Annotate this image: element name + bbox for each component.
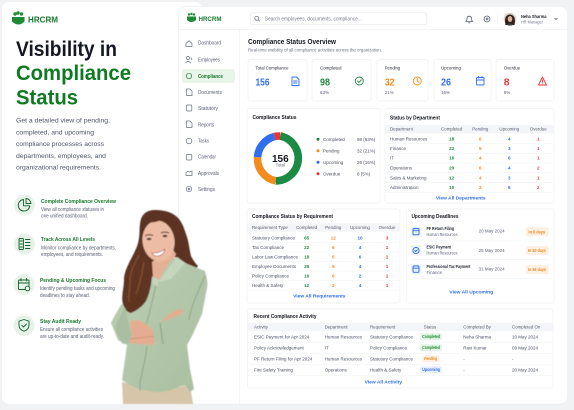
activity table: Completed On — [512, 324, 541, 330]
requirement table: 12 — [304, 283, 310, 288]
activity table: Ravi Kumar — [463, 345, 487, 350]
KPI: upcoming: 26 — [441, 76, 451, 88]
page heading — [248, 37, 382, 54]
panel: compliance status by requirement: View All Requirements — [293, 294, 346, 300]
activity table: Neha Sharma — [463, 334, 492, 339]
status badges — [420, 333, 442, 373]
face — [140, 218, 177, 264]
department table: 18 — [449, 136, 455, 141]
panel: recent compliance activity: View All Activity — [365, 380, 402, 386]
feature: stay audit ready: Stay Audit Ready — [40, 319, 82, 325]
department table: Human Resources — [390, 136, 428, 141]
department table: 6 — [508, 156, 511, 161]
activity table: 09 May 2024 — [512, 345, 539, 350]
department table: 1 — [537, 136, 540, 141]
deadline: professional tax payment: 31 May 2024 — [479, 267, 505, 272]
panel: status by department: View All Departments — [436, 196, 486, 202]
donut legend: 26 (16%) — [357, 160, 376, 165]
feature: complete compliance overview: View all compliance statuses in — [41, 207, 104, 213]
panel: recent compliance activity — [248, 309, 553, 388]
feature: stay audit ready: Ensure all compliance activities — [40, 327, 103, 333]
header actions: HR Manager — [521, 20, 543, 24]
woman with crossed arms — [111, 210, 207, 404]
left sleeve — [115, 307, 132, 344]
header actions — [466, 13, 558, 26]
title — [16, 38, 131, 110]
deadline: ESIC payment: ESIC Payment — [426, 245, 451, 250]
intro paragraph: organizational requirements. — [16, 164, 101, 172]
panel: status by department — [385, 108, 554, 203]
deadline: professional tax payment: In 16 days — [528, 267, 546, 272]
KPI: upcoming — [434, 60, 491, 101]
status badges: Completed — [422, 345, 440, 350]
activity table: Human Resources — [325, 334, 363, 339]
department table: 6 — [479, 166, 482, 170]
KPI: pending — [377, 60, 428, 101]
requirement table: Labor Law Compliance — [252, 254, 299, 259]
intro paragraph: departments, employees, and — [16, 153, 107, 160]
hair top — [140, 211, 177, 238]
neck and chest — [152, 246, 176, 286]
deadline: PF return filing — [411, 226, 549, 237]
intro paragraph: completed, and upcoming — [16, 129, 95, 136]
requirement table: 18 — [304, 254, 310, 259]
KPI: total compliance: Total Compliance — [256, 66, 289, 72]
KPI: pending: 21% — [385, 90, 394, 95]
title: Visibility in — [16, 38, 117, 61]
smile — [152, 249, 165, 256]
feature: pending and upcoming focus: Identify pending tasks and upcoming — [40, 286, 115, 292]
logo: dashboard: HRCRM — [198, 16, 222, 23]
title: Status — [16, 86, 78, 110]
requirement table: 5 — [332, 264, 335, 269]
requirement table: 1 — [386, 264, 389, 269]
activity table: Activity — [254, 324, 269, 330]
feature: track across all levels — [14, 234, 116, 258]
donut legend: Upcoming — [323, 160, 344, 165]
department table: 4 — [508, 166, 511, 170]
department table: 16 — [449, 156, 455, 161]
title: Compliance — [16, 62, 131, 85]
requirement table: 2 — [332, 283, 335, 288]
feature: pending and upcoming focus — [14, 274, 115, 299]
status badges: Pending — [424, 356, 438, 361]
requirement table: Health & Safety — [252, 283, 284, 288]
requirement table — [248, 223, 400, 290]
department table: 1 — [537, 146, 540, 151]
panel: upcoming deadlines: Upcoming Deadlines — [412, 214, 458, 220]
deadline: professional tax payment: Professional Tax Payment — [426, 264, 471, 269]
requirement table: 6 — [332, 273, 335, 278]
department table: 4 — [479, 156, 482, 161]
activity table: Health & Safety — [370, 367, 402, 372]
activity table: - — [463, 367, 465, 372]
user name: Neha Sharma — [521, 14, 547, 20]
panel: recent compliance activity: Recent Compliance Activity — [254, 314, 317, 320]
requirement table: Requirement Type — [252, 225, 288, 230]
activity table: Human Resources — [325, 356, 363, 361]
deadline: professional tax payment: Finance — [426, 270, 443, 275]
panel: left intro card — [2, 2, 202, 404]
activity table: IT — [325, 345, 329, 350]
requirement table: 2 — [359, 273, 362, 278]
activity table: Operations — [325, 367, 347, 372]
department table: 22 — [449, 146, 455, 151]
activity table: Requirement — [370, 324, 396, 330]
activity table — [248, 323, 552, 375]
sidebar navigation — [182, 41, 235, 193]
requirement table: 4 — [359, 245, 362, 250]
activity table: ESIC Payment for Apr 2024 — [254, 334, 310, 339]
panel: dashboard window — [178, 6, 568, 404]
department table: Department — [390, 127, 414, 132]
requirement table: 25 — [304, 264, 310, 269]
deadline: PF return filing: PF Return Filing — [426, 226, 454, 231]
deadline: ESIC payment: Human Resources — [426, 251, 458, 256]
deadline: ESIC payment: 25 May 2024 — [479, 248, 505, 253]
activity table: 20 May 2024 — [512, 367, 539, 372]
shirt body — [111, 257, 207, 392]
feature: track across all levels: employees, and requirements. — [41, 252, 103, 258]
page heading: Compliance Status Overview — [248, 37, 336, 46]
panel: compliance status by requirement — [247, 209, 400, 303]
deadline: ESIC payment: In 10 days — [528, 248, 546, 253]
donut legend: Overdue — [323, 171, 341, 176]
department table: Upcoming — [499, 127, 520, 132]
logo: HRCRM intro: HRCRM — [28, 14, 58, 24]
activity table: Policy Compliance — [370, 345, 408, 350]
icon: chevron — [554, 18, 558, 20]
sidebar navigation: Dashboard — [198, 41, 221, 47]
KPI: total compliance: 156 — [256, 76, 270, 88]
folded sleeve — [153, 315, 192, 344]
department table: 12 — [449, 175, 455, 180]
department table: 5 — [479, 146, 482, 151]
panel: compliance status donut — [247, 108, 380, 203]
donut legend: Pending — [323, 148, 340, 153]
feature: stay audit ready — [14, 315, 104, 340]
requirement table: 12 — [331, 235, 336, 240]
arms crossed — [128, 320, 156, 345]
requirement table: 1 — [386, 273, 389, 278]
requirement table: 22 — [304, 245, 310, 250]
feature: stay audit ready: are up-to-date and audit-ready. — [40, 334, 104, 340]
search bar: Search employees, documents, compliance... — [265, 17, 362, 23]
requirement table: 5 — [332, 254, 335, 259]
requirement table: Statutory Compliance — [252, 235, 296, 240]
panel: compliance status donut: Compliance Status — [252, 115, 296, 121]
department table: Sales & Marketing — [390, 175, 427, 180]
icon: settings — [484, 16, 490, 22]
logo: HRCRM intro — [12, 11, 58, 24]
shirt seams — [140, 276, 205, 391]
sidebar navigation: Reports — [198, 122, 214, 128]
department table: IT — [390, 156, 394, 161]
donut legend: 8 (5%) — [357, 171, 371, 176]
department table: 4 — [508, 136, 511, 141]
department table: 4 — [479, 175, 482, 180]
activity table: Statutory Compliance — [370, 356, 414, 361]
activity table: PF Return Filing for Apr 2024 — [254, 356, 313, 361]
donut chart: Total — [276, 163, 285, 168]
KPI: completed: 63% — [320, 90, 329, 95]
requirement table: 1 — [386, 283, 389, 288]
department table: 6 — [479, 136, 482, 141]
sidebar navigation: Calendar — [198, 155, 216, 161]
intro paragraph — [16, 118, 110, 172]
activity table: Status — [424, 324, 437, 330]
panel: upcoming deadlines: View All Upcoming — [449, 290, 493, 296]
KPI: completed: 98 — [320, 76, 330, 88]
hair back — [122, 210, 198, 313]
requirement table: 1 — [386, 254, 389, 259]
pants — [122, 382, 193, 404]
sidebar navigation: Employees — [198, 58, 220, 64]
requirement table: Upcoming — [350, 225, 370, 230]
sidebar navigation: Compliance — [198, 74, 223, 80]
department table: 1 — [537, 175, 540, 180]
donut chart: 156 — [272, 154, 289, 165]
deadline: ESIC payment — [411, 245, 549, 256]
donut chart — [258, 136, 298, 181]
activity table: - — [512, 356, 514, 361]
activity table: Policy Acknowledgement — [254, 345, 305, 350]
department table: 3 — [508, 175, 511, 180]
KPI: overdue — [496, 60, 554, 101]
donut legend: Completed — [323, 137, 345, 142]
search bar — [250, 13, 427, 25]
sidebar navigation: Documents — [198, 90, 222, 96]
icon: bell — [466, 16, 472, 23]
panel: upcoming deadlines — [407, 209, 554, 303]
KPI: total compliance — [248, 60, 307, 101]
KPI: pending: Pending — [385, 66, 400, 72]
requirement table: 6 — [359, 254, 362, 259]
feature: pending and upcoming focus: deadlines to stay ahead. — [40, 293, 90, 299]
requirement table: Policy Compliance — [252, 273, 290, 278]
department table: Overdue — [530, 127, 547, 132]
status badges: Completed — [422, 334, 440, 339]
intro paragraph: compliance processes across — [16, 141, 104, 148]
KPI: overdue: 5% — [504, 90, 510, 95]
page heading: Real-time visibility of all compliance activities across the organization. — [248, 48, 382, 54]
requirement table: 65 — [304, 235, 310, 240]
activity table: 10 May 2024 — [512, 334, 539, 339]
department table: Operations — [390, 166, 413, 170]
requirement table: Overdue — [379, 225, 396, 230]
KPI: completed: Completed — [320, 66, 342, 72]
activity table: - — [463, 356, 465, 361]
KPI: completed — [312, 60, 371, 101]
requirement table: Tax Compliance — [252, 245, 285, 250]
requirement table: 1 — [386, 245, 389, 250]
requirement table: 6 — [332, 245, 335, 250]
department table: 20 — [449, 166, 455, 170]
KPI: upcoming: Upcoming — [441, 66, 461, 72]
sidebar navigation: Tasks — [198, 138, 209, 144]
sidebar navigation: Settings — [198, 187, 215, 193]
deadline: PF return filing: Human Resources — [426, 232, 458, 237]
requirement table: 3 — [386, 235, 389, 240]
department table: 6 — [508, 185, 511, 190]
panel: compliance status by requirement: Compliance Status by Requirement — [252, 214, 333, 220]
activity table: Fire Safety Training — [254, 367, 294, 372]
department table: 1 — [537, 156, 540, 161]
activity table: Statutory Compliance — [370, 334, 414, 339]
department table: 3 — [508, 146, 511, 151]
feature: track across all levels: Monitor compliance by departments, — [41, 246, 116, 252]
front hair lock — [122, 236, 152, 313]
donut legend: 32 (21%) — [357, 148, 376, 153]
deadline: professional tax payment — [411, 264, 549, 275]
panel: status by department: Status by Department — [390, 116, 440, 122]
intro paragraph: Get a detailed view of pending, — [16, 118, 110, 124]
feature: complete compliance overview: one unified dashboard. — [41, 214, 88, 220]
donut legend — [316, 137, 376, 176]
department table: 10 — [449, 185, 455, 190]
donut legend: 98 (63%) — [357, 137, 376, 142]
requirement table: 10 — [357, 235, 363, 240]
department table: Completed — [441, 127, 463, 132]
deadline: PF return filing: In 5 days — [528, 229, 545, 234]
requirement table: 16 — [304, 273, 310, 278]
department table — [386, 125, 554, 192]
deadline: PF return filing: 20 May 2024 — [479, 229, 505, 234]
department table: Pending — [472, 127, 489, 132]
feature: complete compliance overview — [14, 194, 117, 220]
nav active highlight — [182, 69, 235, 83]
requirement table: Pending — [325, 225, 342, 230]
department table: Administration — [390, 185, 419, 190]
department table: Finance — [390, 146, 407, 151]
KPI: overdue: 8 — [504, 76, 510, 88]
requirement table: 4 — [359, 283, 362, 288]
requirement table: Completed — [296, 225, 318, 230]
department table: 2 — [537, 166, 540, 170]
activity table: Completed By — [463, 324, 492, 330]
feature: complete compliance overview: Complete Compliance Overview — [41, 199, 117, 205]
feature: track across all levels: Track Across All Levels — [41, 237, 95, 243]
requirement table: 4 — [359, 264, 362, 269]
avatar — [504, 13, 516, 26]
department table: 3 — [479, 185, 482, 190]
logo: dashboard — [187, 13, 222, 23]
status badges: Upcoming — [422, 367, 440, 372]
eyes and brows — [145, 232, 169, 240]
KPI: pending: 32 — [385, 76, 395, 88]
sidebar navigation: Approvals — [198, 171, 219, 177]
activity table: Department — [325, 324, 348, 330]
requirement table: Employee Documents — [252, 264, 297, 269]
department table: 2 — [537, 185, 540, 190]
sidebar navigation: Statutory — [198, 106, 218, 112]
KPI: upcoming: 16% — [441, 90, 450, 95]
feature: pending and upcoming focus: Pending & Upcoming Focus — [40, 278, 106, 284]
KPI: overdue: Overdue — [504, 66, 520, 72]
collar — [151, 257, 185, 287]
